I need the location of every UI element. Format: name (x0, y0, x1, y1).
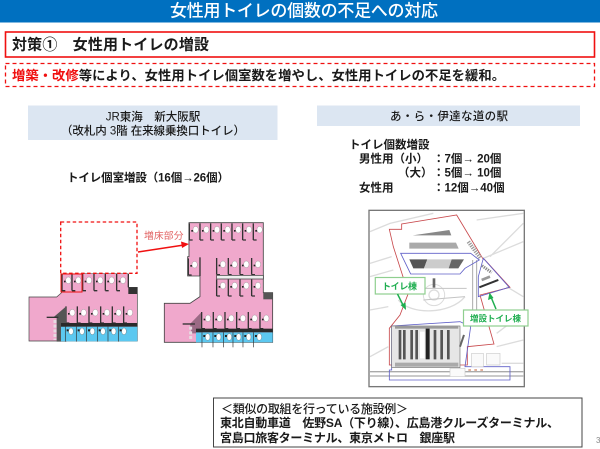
middle stalls after (217, 258, 263, 296)
lower stalls before (66, 306, 133, 323)
main building (392, 326, 464, 368)
panel heading: roadside station: あ・ら・伊達な道の駅 (390, 109, 508, 123)
text: toilet count increases: ：5個→ 10個 (433, 166, 501, 180)
side stall after (188, 258, 197, 275)
callout: added toilet building: 増設トイレ棟 (470, 314, 521, 324)
text: toilet count increases (349, 138, 505, 194)
label: expansion area: 増床部分 (144, 229, 184, 242)
text: toilet count increases: 女性用 (359, 180, 394, 194)
arrow: toilet building (398, 294, 406, 310)
callout: added toilet building (464, 310, 528, 326)
mechanical corner after (190, 313, 201, 333)
panel heading: Shin-Osaka station: JR東海 新大阪駅 (106, 110, 201, 124)
text: toilet count increases: （大） (398, 166, 432, 180)
surrounding roads (370, 213, 523, 376)
panel heading: Shin-Osaka station: （改札内 3階 在来線乗換口トイレ） (61, 124, 245, 138)
heading: measure 1 (6, 32, 594, 57)
text: toilet count increases: ：12個→40個 (433, 182, 505, 194)
similar facilities box: 東北自動車道 佐野SA（下り線）、広島港クルーズターミナル、 (220, 415, 559, 430)
arrow: expansion (138, 242, 189, 252)
blue rooms after (196, 329, 273, 347)
panel heading: Shin-Osaka station (28, 106, 278, 140)
similar facilities box: 宮島口旅客ターミナル、東京メトロ 銀座駅 (220, 430, 455, 445)
top stalls after (189, 223, 262, 240)
floor area before (29, 274, 137, 341)
text: toilet count increases: トイレ個数増設 (349, 138, 430, 152)
arrow: added toilet building (488, 292, 496, 309)
title banner (0, 0, 600, 22)
floor plan: after (164, 223, 273, 347)
panel heading: roadside station (317, 106, 580, 126)
text: toilet count increases: ：7個→ 20個 (433, 152, 501, 166)
dashed summary box: 増築・改修等により、女性用トイレ個室数を増やし、女性用トイレの不足を緩和。 (12, 67, 505, 83)
floor plan: before (29, 274, 137, 342)
callout: toilet building: トイレ棟 (382, 280, 417, 292)
expansion area dashed box and red highlight (61, 222, 137, 292)
parking lots (409, 230, 498, 288)
text: toilet count increases: 男性用（小） (359, 152, 428, 166)
title banner: 女性用トイレの個数の不足への対応 (170, 2, 438, 20)
mechanical corner before (53, 307, 67, 342)
lower stalls after (202, 312, 269, 329)
similar facilities box (214, 398, 582, 447)
text: stall increase: トイレ個室増設（16個→26個） (67, 170, 229, 184)
floor area after (164, 223, 273, 342)
site boundary (389, 215, 510, 365)
similar facilities box: ＜類似の取組を行っている施設例＞ (221, 401, 408, 416)
dashed summary box (6, 64, 594, 86)
blue rooms before (61, 323, 137, 342)
blue boundaries (389, 253, 510, 380)
site map (369, 210, 524, 387)
upper stalls before (62, 274, 128, 291)
lower plaza (450, 353, 500, 377)
heading: measure 1: 対策① 女性用トイレの増設 (12, 36, 209, 54)
callout: toilet building (375, 278, 425, 294)
